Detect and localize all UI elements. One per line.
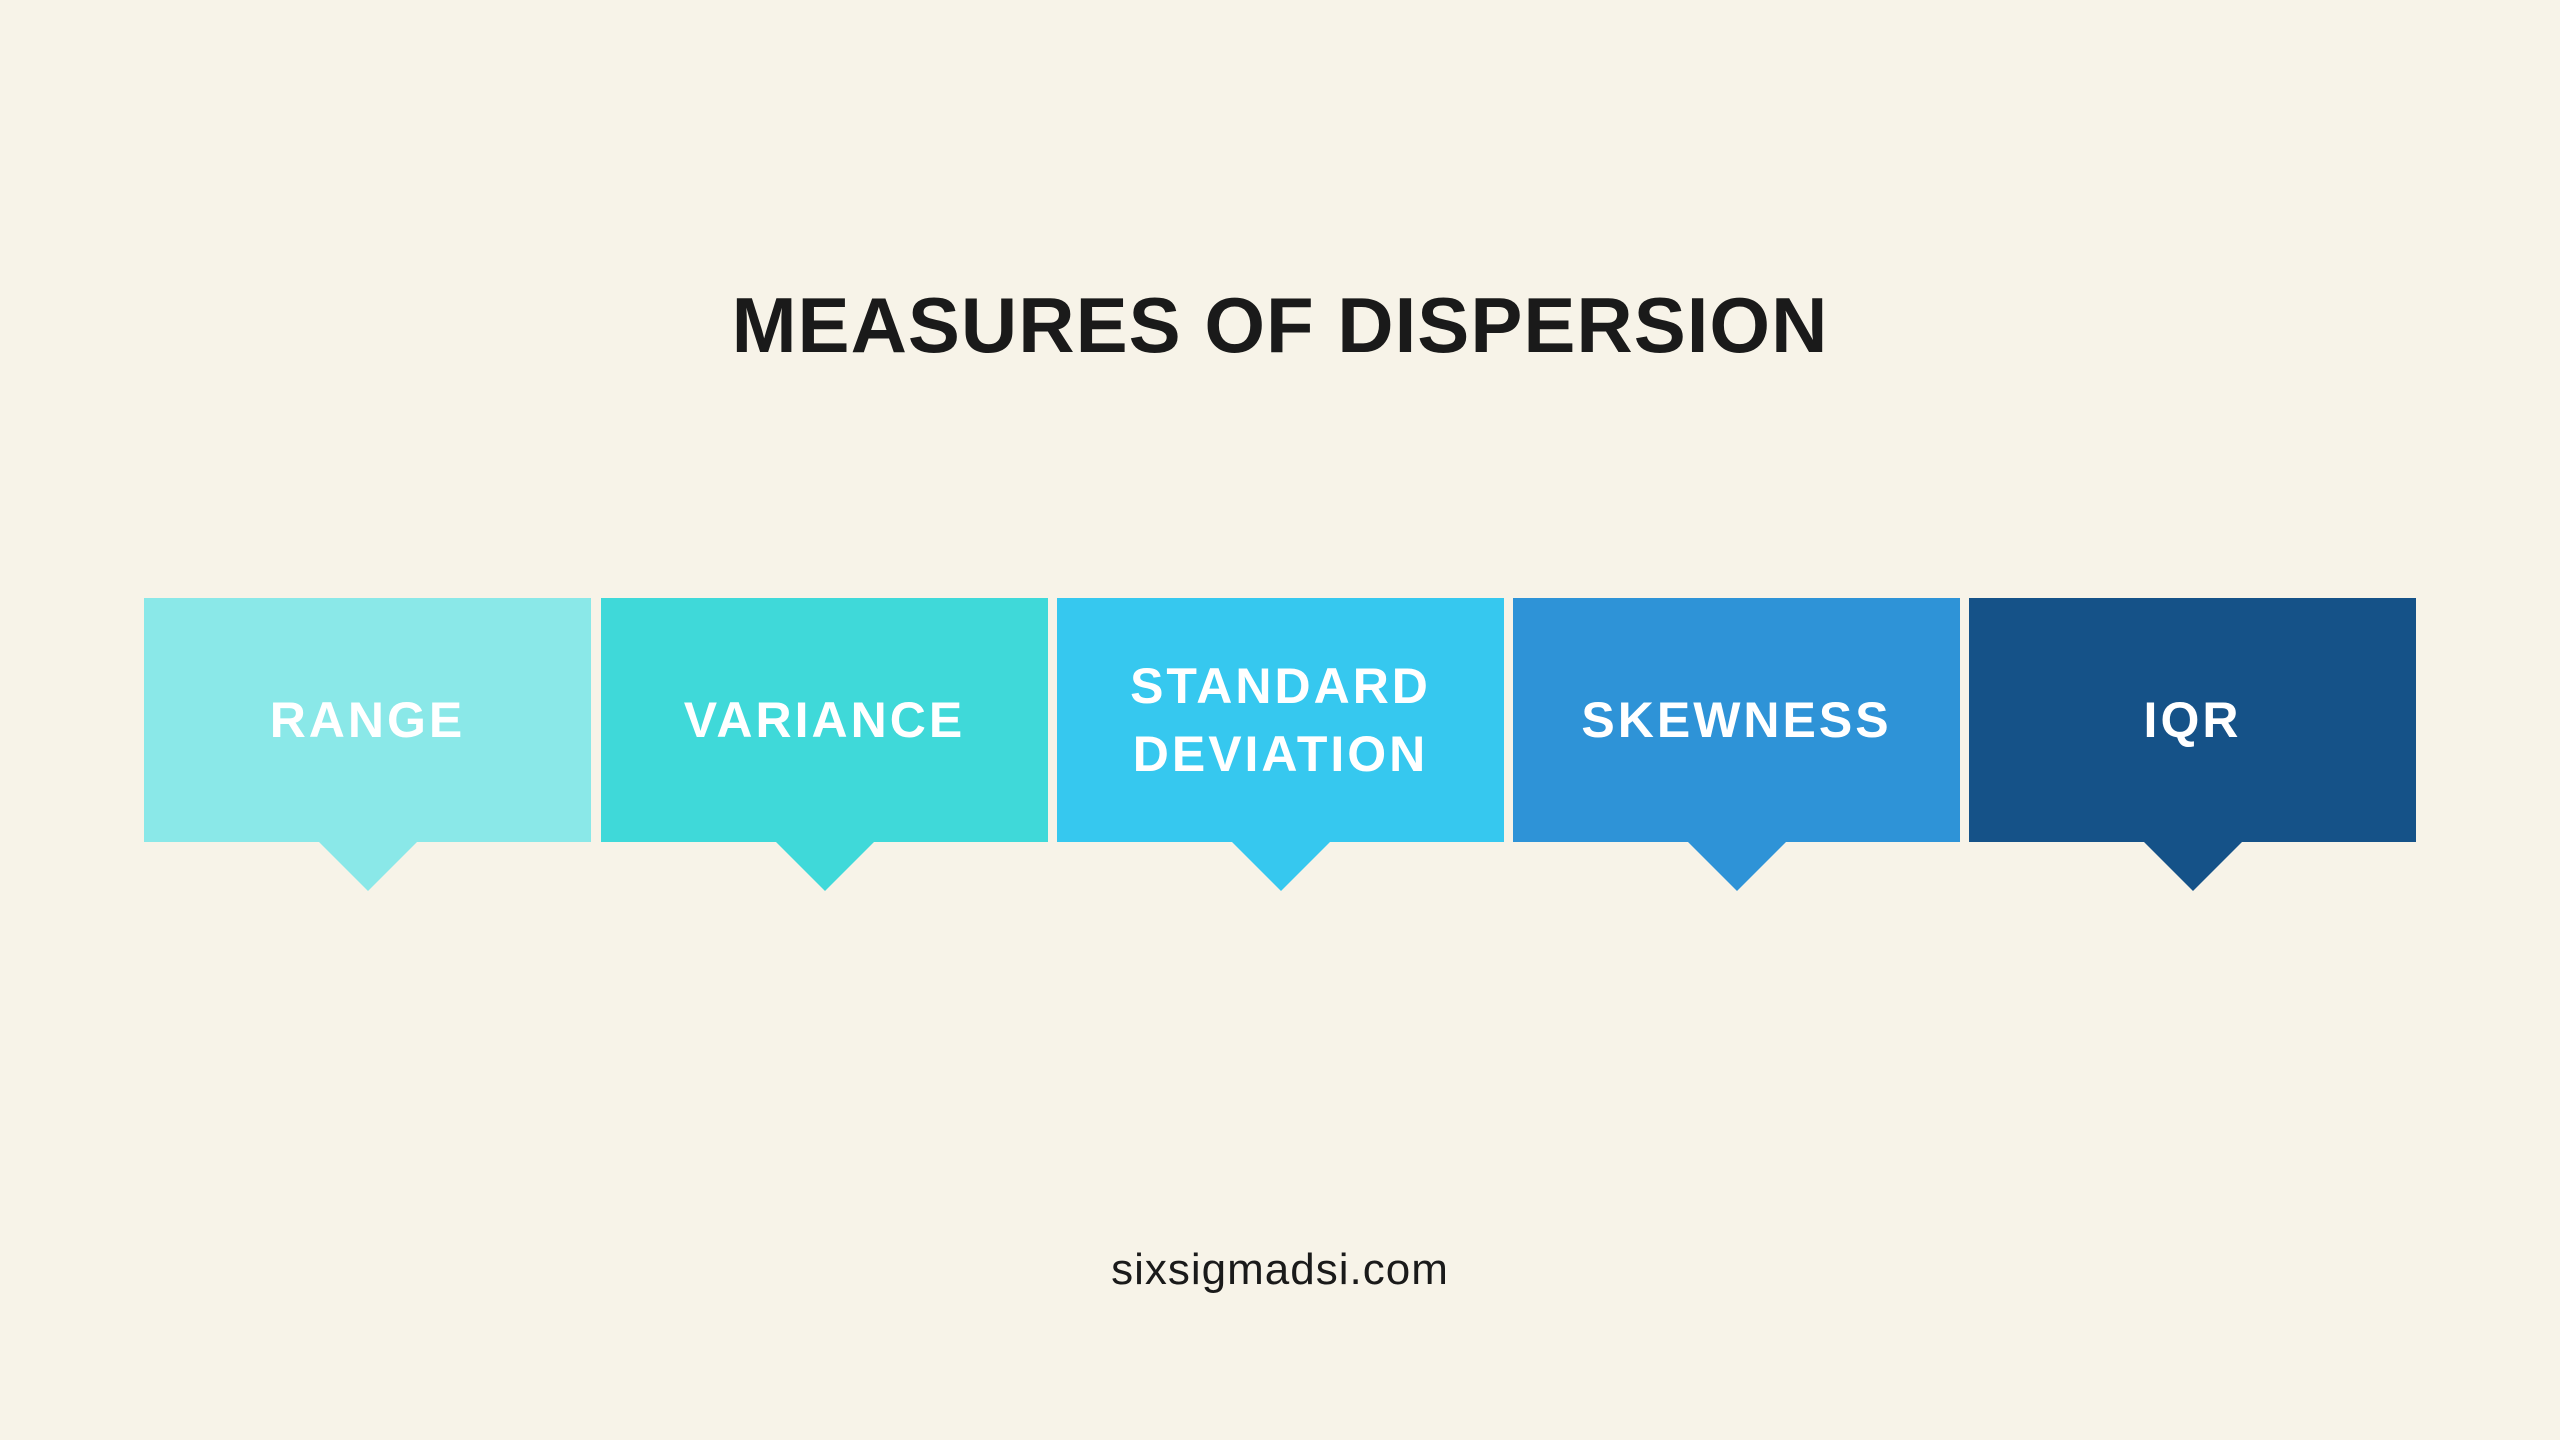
- panel: skewness: SKEWNESS: [1581, 692, 1892, 748]
- panel: IQR: [1969, 598, 2416, 842]
- panel: range: [144, 598, 591, 842]
- footer url: sixsigmadsi.com: [1111, 1245, 1449, 1294]
- panel: range: RANGE: [270, 692, 465, 748]
- panel: standard deviation: [1057, 598, 1504, 842]
- title: MEASURES OF DISPERSION: [732, 281, 1828, 369]
- panel: variance: [601, 598, 1048, 842]
- panel: skewness: [1513, 598, 1960, 842]
- panel: standard deviation: STANDARD: [1130, 658, 1431, 714]
- panel: IQR: IQR: [2144, 692, 2241, 748]
- panel: variance: VARIANCE: [684, 692, 965, 748]
- panel: standard deviation: DEVIATION: [1133, 726, 1428, 782]
